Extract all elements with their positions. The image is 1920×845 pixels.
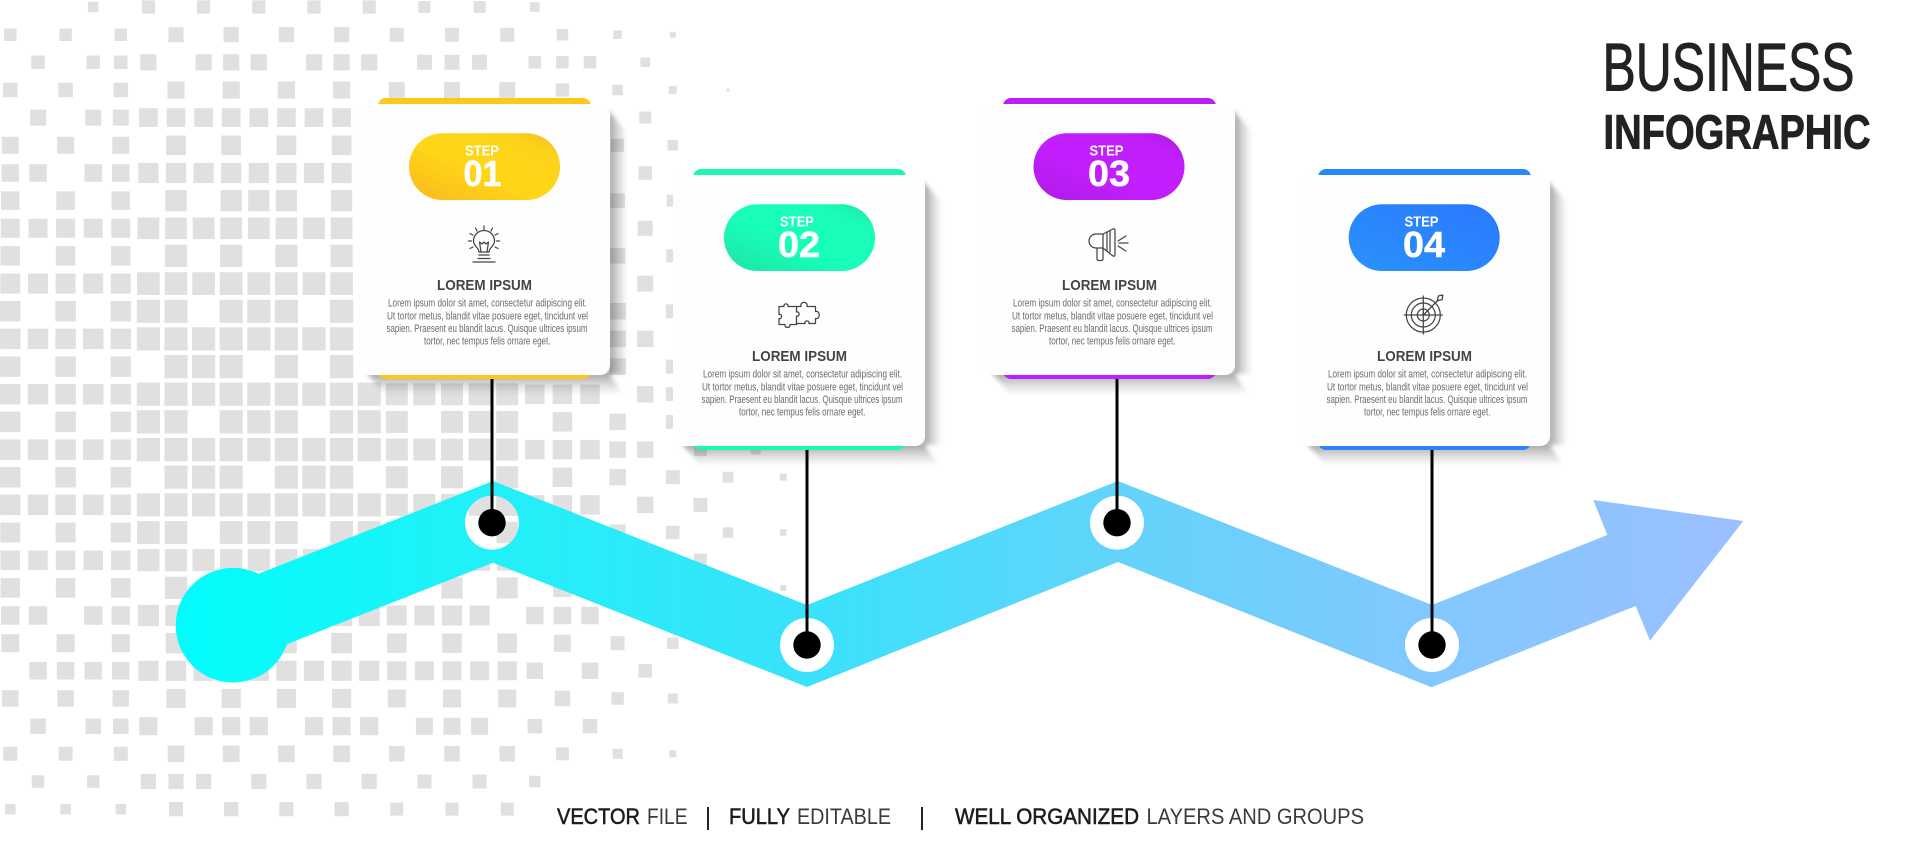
body text: Lorem ipsum dolor sit amet, consectetur adipiscing elit. bbox=[388, 298, 587, 310]
body text: Ut tortor metus, blandit vitae posuere eget, tincidunt vel bbox=[387, 310, 588, 322]
step pill 01: 01 bbox=[464, 153, 502, 194]
zigzag arrow bbox=[176, 481, 1743, 687]
body text: sapien. Praesent eu blandit lacus. Quisque ultrices ipsum bbox=[702, 394, 902, 406]
body text: Ut tortor metus, blandit vitae posuere eget, tincidunt vel bbox=[1012, 310, 1213, 322]
heading: LOREM IPSUM bbox=[752, 348, 847, 365]
heading: LOREM IPSUM bbox=[1062, 277, 1157, 294]
body text: Lorem ipsum dolor sit amet, consectetur adipiscing elit. bbox=[703, 368, 902, 380]
body text: tortor, nec tempus felis ornare eget. bbox=[739, 407, 866, 419]
body text: tortor, nec tempus felis ornare eget. bbox=[1364, 407, 1490, 419]
body text: Lorem ipsum dolor sit amet, consectetur adipiscing elit. bbox=[1013, 298, 1212, 310]
title bbox=[1602, 30, 1870, 159]
arrow start circle bbox=[176, 568, 290, 682]
body text: sapien. Praesent eu blandit lacus. Quisque ultrices ipsum bbox=[1326, 394, 1528, 406]
body text: Lorem ipsum dolor sit amet, consectetur adipiscing elit. bbox=[1328, 368, 1527, 380]
icon: megaphone bbox=[1089, 229, 1128, 260]
step pill 03: 03 bbox=[1088, 153, 1130, 194]
footer tagline bbox=[557, 804, 1364, 830]
step pill 03 bbox=[1034, 133, 1184, 200]
step pill 03: STEP bbox=[1090, 142, 1124, 160]
footer tagline: LAYERS AND GROUPS bbox=[1146, 804, 1364, 829]
body text bbox=[386, 298, 588, 348]
body text: sapien. Praesent eu blandit lacus. Quisque ultrices ipsum bbox=[386, 323, 588, 335]
step pill 04: 04 bbox=[1403, 224, 1446, 265]
body text bbox=[1012, 298, 1213, 348]
card: step 02 bbox=[673, 169, 942, 466]
step pill 01 bbox=[409, 133, 560, 200]
step pill 04: STEP bbox=[1404, 214, 1438, 230]
icon: light bulb bbox=[468, 226, 500, 262]
connector: step 04 bbox=[1418, 450, 1446, 659]
footer tagline: FILE bbox=[647, 804, 688, 829]
body text: tortor, nec tempus felis ornare eget. bbox=[1049, 336, 1176, 348]
connector: step 03 bbox=[1103, 379, 1131, 536]
connector: step 01 bbox=[478, 379, 506, 536]
heading: LOREM IPSUM bbox=[1377, 348, 1472, 365]
icon: target bbox=[1404, 295, 1443, 334]
icon: puzzle bbox=[779, 302, 819, 328]
connector: step 02 bbox=[793, 450, 821, 659]
arrow band with ring cut-outs and arrowhead bbox=[233, 481, 1743, 687]
footer tagline: WELL ORGANIZED bbox=[955, 804, 1139, 829]
card: step 01 bbox=[358, 98, 627, 395]
footer tagline: FULLY bbox=[729, 804, 790, 829]
card: step 04 bbox=[1298, 169, 1567, 466]
body text: tortor, nec tempus felis ornare eget. bbox=[424, 336, 550, 348]
body text: Ut tortor metus, blandit vitae posuere eget, tincidunt vel bbox=[702, 381, 903, 393]
body text bbox=[1326, 368, 1528, 419]
footer tagline: EDITABLE bbox=[797, 804, 891, 829]
card: step 03 bbox=[983, 98, 1252, 395]
step pill 02: STEP bbox=[780, 214, 814, 230]
step pill 04 bbox=[1349, 204, 1500, 271]
step pill 01: STEP bbox=[465, 142, 499, 160]
heading: LOREM IPSUM bbox=[437, 277, 532, 294]
footer tagline: VECTOR bbox=[557, 804, 640, 829]
step pill 02 bbox=[724, 204, 875, 271]
body text: Ut tortor metus, blandit vitae posuere eget, tincidunt vel bbox=[1327, 381, 1528, 393]
body text: sapien. Praesent eu blandit lacus. Quisque ultrices ipsum bbox=[1012, 323, 1212, 335]
step pill 02: 02 bbox=[778, 224, 820, 265]
body text bbox=[702, 368, 903, 419]
